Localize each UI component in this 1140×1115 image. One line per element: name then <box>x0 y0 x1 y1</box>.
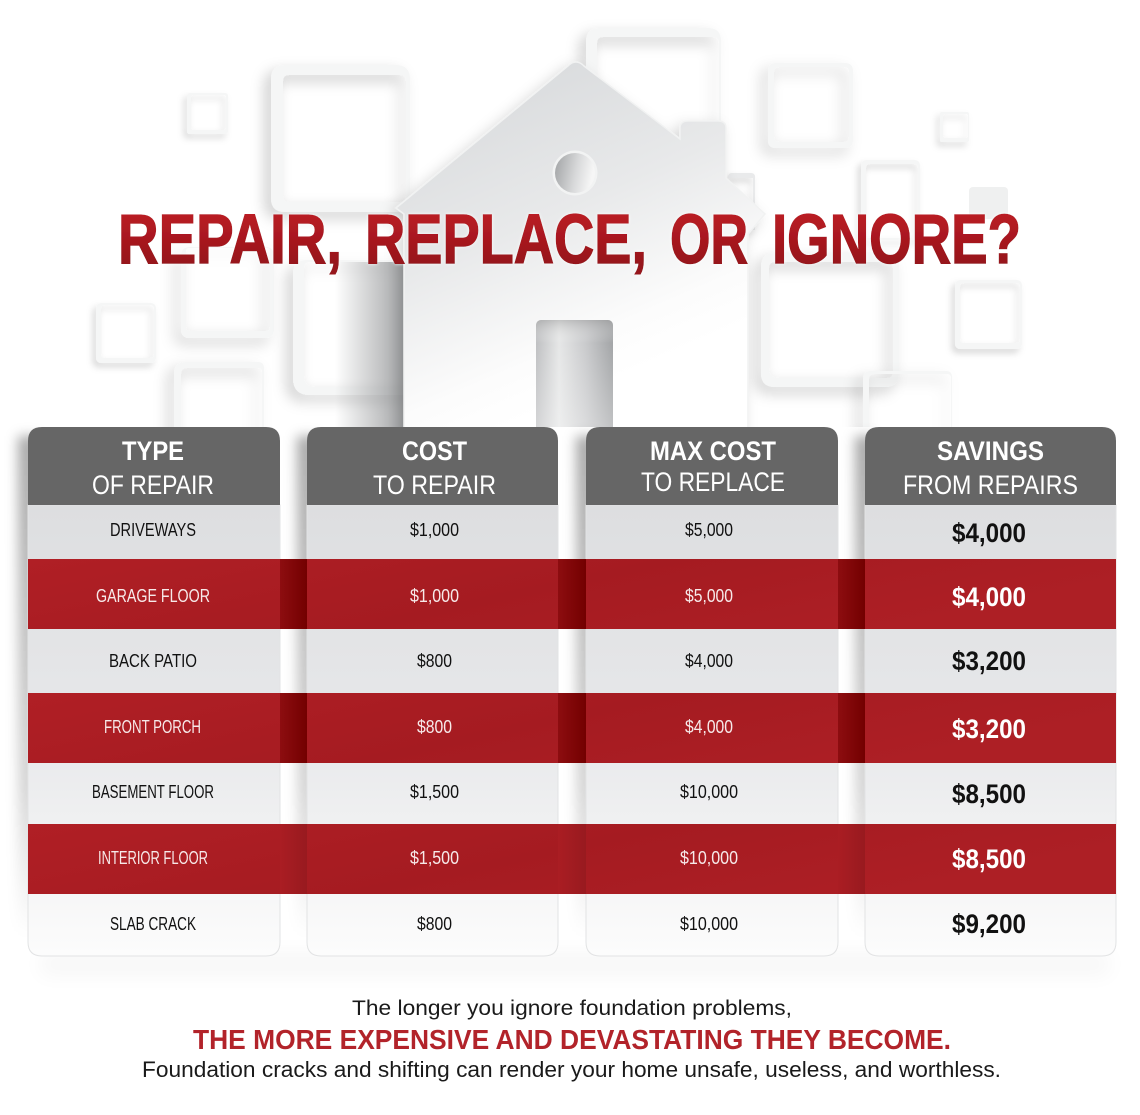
row: front porch: $4,000 <box>685 717 733 737</box>
row: front porch: $800 <box>417 717 452 737</box>
title: REPAIR, <box>118 200 342 278</box>
row: back patio: BACK PATIO <box>109 651 197 671</box>
column: max cost to replace: TO REPLACE <box>641 467 785 497</box>
row: front porch <box>104 714 1026 744</box>
white backdrop below table top <box>0 427 1140 1115</box>
row: garage floor: GARAGE FLOOR <box>96 586 210 606</box>
table <box>28 427 1116 956</box>
title <box>118 200 1021 278</box>
house illustration <box>396 62 765 440</box>
row: driveways: $1,000 <box>410 520 459 540</box>
row: interior floor: $10,000 <box>680 848 738 868</box>
row: basement floor: BASEMENT FLOOR <box>92 782 214 802</box>
footer text <box>142 997 1001 1082</box>
row: driveways: DRIVEWAYS <box>110 520 196 540</box>
row: interior floor: INTERIOR FLOOR <box>98 848 208 868</box>
column: savings from repairs <box>865 427 1116 956</box>
title: REPLACE, <box>365 200 647 278</box>
row: back patio <box>109 646 1026 676</box>
row: front porch: FRONT PORCH <box>104 717 201 737</box>
round attic window <box>552 150 598 196</box>
row: slab crack: $9,200 <box>952 909 1026 939</box>
house silhouette <box>396 62 765 440</box>
table column shadows <box>18 436 1110 976</box>
column: cost to repair: TO REPAIR <box>373 470 496 500</box>
row: interior floor <box>98 844 1026 874</box>
row: interior floor: $8,500 <box>952 844 1026 874</box>
title: OR <box>670 200 748 278</box>
title: IGNORE? <box>772 200 1021 278</box>
decorative rounded squares <box>96 28 1022 470</box>
red bands <box>28 559 1116 894</box>
row: driveways: $4,000 <box>952 518 1026 548</box>
row: slab crack: $800 <box>417 914 452 934</box>
column: max cost to replace <box>586 427 838 956</box>
row: garage floor: $5,000 <box>685 586 733 606</box>
row: slab crack: SLAB CRACK <box>110 914 196 934</box>
row: basement floor: $1,500 <box>410 782 459 802</box>
footer line 3: Foundation cracks and shifting can render your home unsafe, useless, and worthless. <box>142 1057 1001 1082</box>
row: front porch: $3,200 <box>952 714 1026 744</box>
row: basement floor: $8,500 <box>952 779 1026 809</box>
light filled square <box>969 187 1008 219</box>
door <box>536 320 613 435</box>
column: type of repair: TYPE <box>122 436 184 466</box>
column: cost to repair: COST <box>402 436 467 466</box>
column: type of repair: OF REPAIR <box>92 470 214 500</box>
row: driveways <box>110 518 1026 548</box>
row: garage floor <box>96 582 1026 612</box>
row: basement floor: $10,000 <box>680 782 738 802</box>
column: type of repair <box>28 427 280 956</box>
shading cast by the house on the left square <box>335 262 404 427</box>
row: back patio: $4,000 <box>685 651 733 671</box>
footer line 1: The longer you ignore foundation problems, <box>352 997 792 1020</box>
row: interior floor: $1,500 <box>410 848 459 868</box>
row: basement floor <box>92 779 1026 809</box>
footer line 2: red emphasis: THE MORE EXPENSIVE AND DEVASTATING THEY BECOME. <box>193 1024 951 1055</box>
row: slab crack: $10,000 <box>680 914 738 934</box>
column: savings from repairs: FROM REPAIRS <box>903 470 1078 500</box>
row: garage floor: $4,000 <box>952 582 1026 612</box>
column: max cost to replace: MAX COST <box>650 436 776 466</box>
row: back patio: $800 <box>417 651 452 671</box>
row: back patio: $3,200 <box>952 646 1026 676</box>
column: savings from repairs: SAVINGS <box>937 436 1044 466</box>
row: driveways: $5,000 <box>685 520 733 540</box>
column: cost to repair <box>307 427 558 956</box>
row: slab crack <box>110 909 1026 939</box>
row: garage floor: $1,000 <box>410 586 459 606</box>
